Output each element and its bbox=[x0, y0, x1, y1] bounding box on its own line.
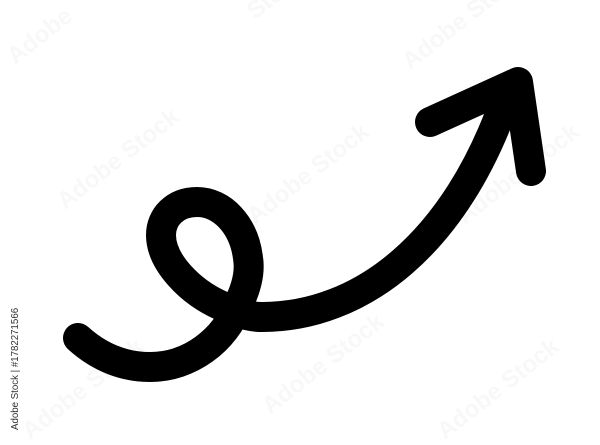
faint stock watermarks: Adobe Stock bbox=[52, 103, 185, 215]
arrow shaft with loop bbox=[78, 95, 507, 367]
faint stock watermarks: Adobe Stock bbox=[432, 333, 565, 445]
icon: curly upward arrow bbox=[78, 82, 531, 367]
faint stock watermarks: Adobe Stock bbox=[242, 118, 375, 230]
faint stock watermarks: Adobe Stock bbox=[17, 333, 150, 445]
faint stock watermarks: Adobe bbox=[2, 2, 78, 70]
faint stock watermarks: Adobe Stock bbox=[452, 118, 585, 230]
faint stock watermarks: Adobe Stock bbox=[257, 308, 390, 420]
stock image id label: Adobe Stock | #1782271566 bbox=[10, 308, 21, 430]
arrow head bbox=[430, 82, 531, 171]
